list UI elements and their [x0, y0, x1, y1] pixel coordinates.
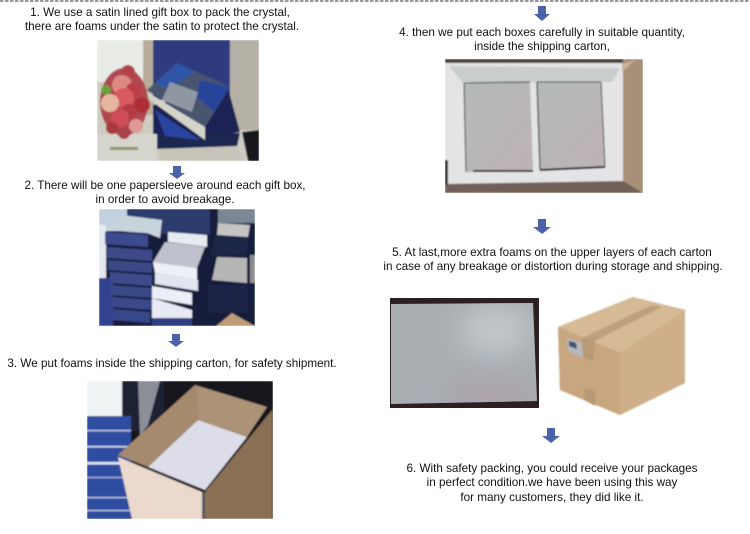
- step 3 text: 3. We put foams inside the shipping carton, for safety shipment.: [7, 357, 337, 370]
- photo: crystal in gift box with flowers: [97, 40, 259, 161]
- step 1 text: 1. We use a satin lined gift box to pack the crystal,: [30, 6, 290, 19]
- arrow 1: [169, 166, 185, 179]
- photo: foam layer on top of carton: [390, 298, 540, 411]
- step 4 text: [399, 26, 685, 53]
- step 6 text: 6. With safety packing, you could receive your packages: [406, 462, 698, 475]
- step 2 text: [24, 179, 306, 206]
- photo: stacked boxes with paper sleeves: [99, 209, 255, 326]
- step 5 text: in case of any breakage or distortion during storage and shipping.: [383, 260, 723, 273]
- step 2 text: in order to avoid breakage.: [95, 193, 235, 206]
- step 2 text: 2. There will be one papersleeve around each gift box,: [24, 179, 306, 192]
- photo: sealed cardboard box: [558, 297, 685, 415]
- photo: gift boxes packed in carton: [445, 59, 643, 193]
- step 6 text: for many customers, they did like it.: [460, 491, 644, 504]
- arrow 3: [534, 6, 550, 21]
- step 6 text: [406, 462, 698, 504]
- step 5 text: 5. At last,more extra foams on the upper layers of each carton: [392, 246, 712, 259]
- step 4 text: 4. then we put each boxes carefully in suitable quantity,: [399, 26, 685, 39]
- step 6 text: in perfect condition.we have been using this way: [427, 476, 678, 489]
- arrow 2: [168, 334, 184, 347]
- photo: foam lined shipping carton: [87, 381, 273, 519]
- top dashed rule: [0, 0, 750, 2]
- step 1 text: [25, 6, 299, 33]
- step 4 text: inside the shipping carton,: [474, 40, 610, 53]
- step 5 text: [383, 246, 723, 273]
- arrow 4: [533, 219, 551, 234]
- step 1 text: there are foams under the satin to protect the crystal.: [25, 20, 299, 33]
- arrow 5: [542, 428, 560, 443]
